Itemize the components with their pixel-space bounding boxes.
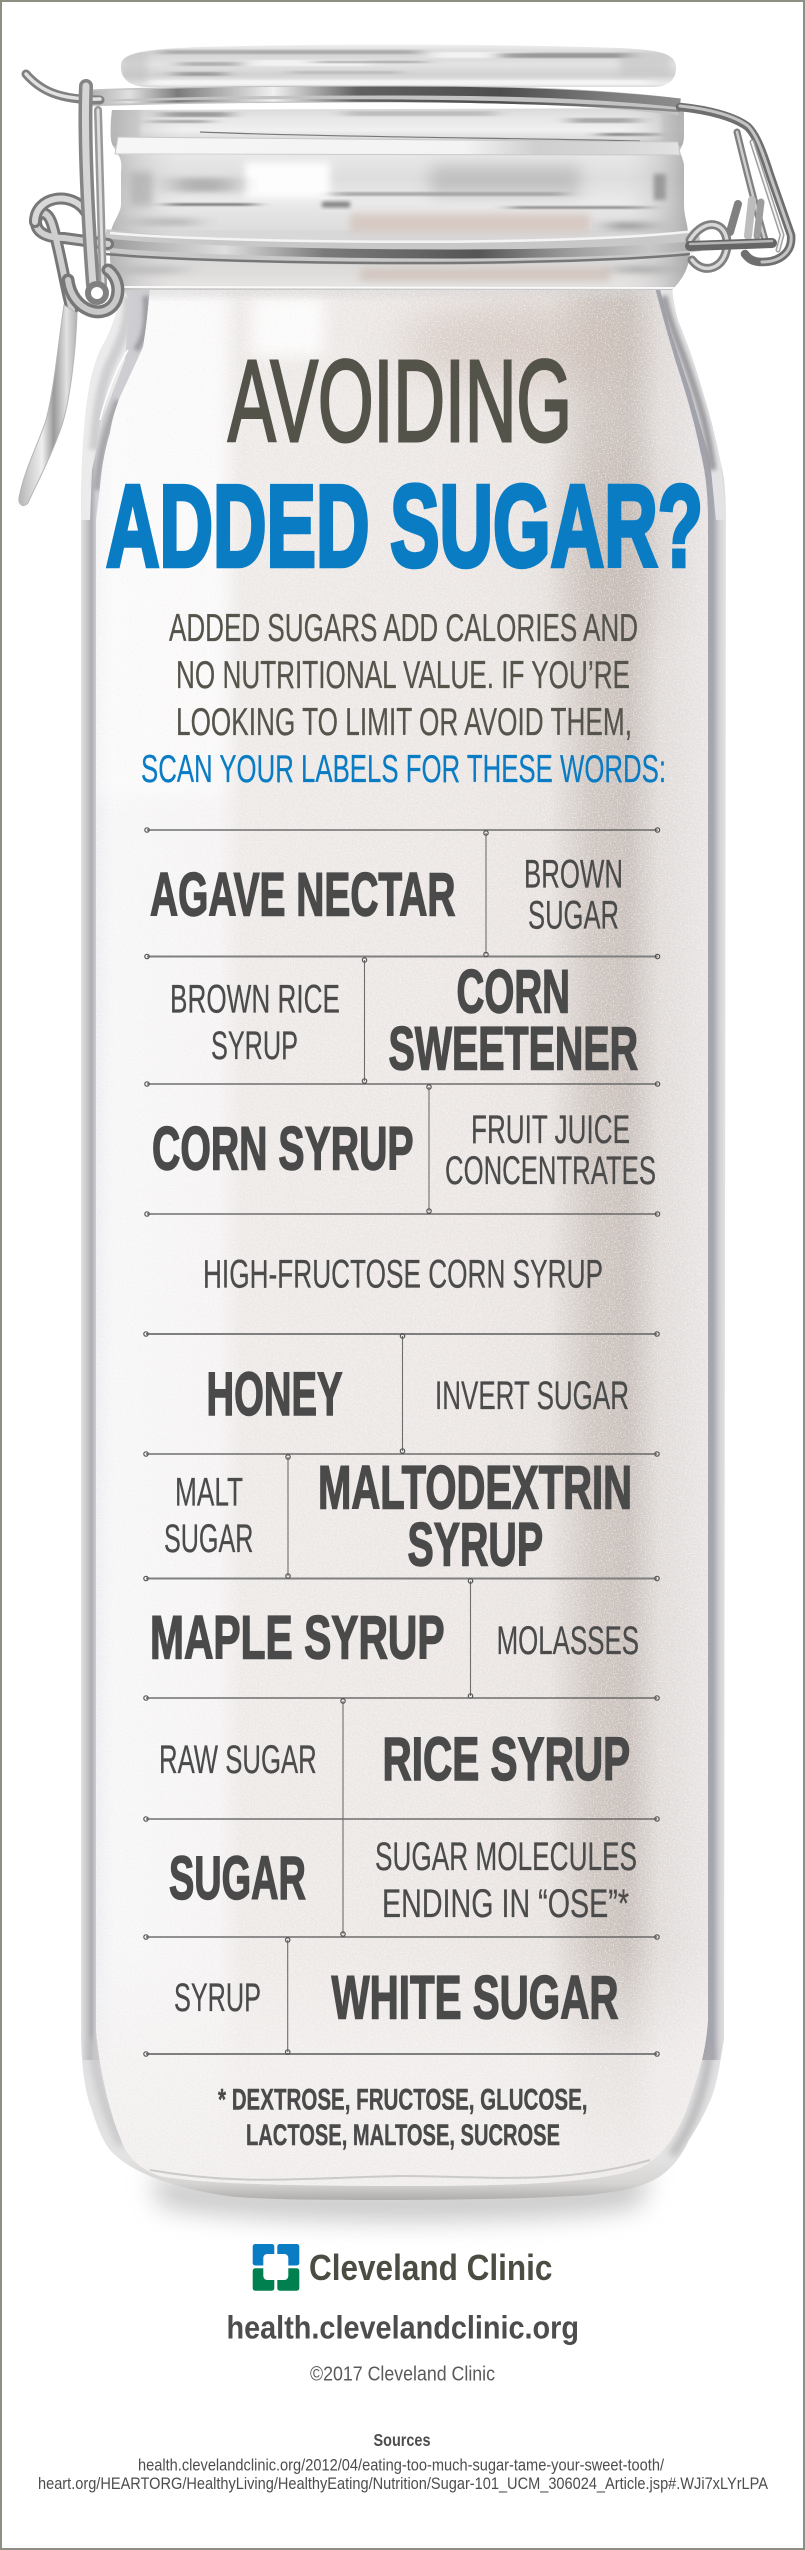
- fruit juice concentrates: [445, 1108, 656, 1193]
- maltodextrin syrup: SYRUP: [408, 1511, 543, 1579]
- sources heading: Sources: [374, 2430, 431, 2450]
- footnote: [218, 2084, 588, 2152]
- upper metal wire band: [82, 91, 680, 111]
- vertical bail wire: [85, 86, 103, 285]
- fruit juice concentrates: FRUIT JUICE: [471, 1108, 630, 1152]
- maltodextrin syrup: MALTODEXTRIN: [318, 1453, 632, 1521]
- rice syrup: RICE SYRUP: [382, 1725, 630, 1793]
- malt sugar: SUGAR: [164, 1517, 253, 1561]
- website: health.clevelandclinic.org: [226, 2310, 579, 2346]
- sources: [38, 2430, 769, 2493]
- sugar molecules ending in ose: [375, 1835, 637, 1926]
- lever loop and arm: [35, 199, 108, 310]
- pins: [730, 200, 761, 236]
- title line: avoiding: AVOIDING: [228, 336, 572, 466]
- brand name: Cleveland Clinic: [309, 2247, 552, 2288]
- outer bail: [680, 106, 791, 262]
- glass lid: [120, 44, 676, 87]
- white gasket ring: [115, 137, 680, 155]
- invert sugar: INVERT SUGAR: [435, 1374, 629, 1418]
- jar neck glass: [105, 103, 695, 293]
- long lever tail: [19, 305, 77, 505]
- copyright: ©2017 Cleveland Clinic: [310, 2364, 495, 2386]
- corn sweetener: [388, 957, 638, 1083]
- brown sugar: [524, 852, 623, 938]
- raw sugar: RAW SUGAR: [159, 1738, 317, 1782]
- white sugar: WHITE SUGAR: [332, 1963, 618, 2031]
- agave nectar: AGAVE NECTAR: [150, 860, 456, 928]
- brown rice syrup: SYRUP: [211, 1024, 298, 1068]
- honey: HONEY: [206, 1360, 342, 1428]
- title: [106, 336, 703, 591]
- list of added sugar names: [150, 852, 656, 2031]
- source link 1: health.clevelandclinic.org/2012/04/eating-too-much-sugar-tame-your-sweet-tooth/: [138, 2456, 664, 2475]
- icon: cleveland clinic logo: [253, 2244, 299, 2291]
- high-fructose corn syrup: HIGH-FRUCTOSE CORN SYRUP: [203, 1252, 603, 1296]
- bottom ring: [68, 270, 118, 312]
- right wire clasp: [680, 106, 791, 268]
- jar bottom rim: [150, 2160, 650, 2180]
- corn sweetener: CORN: [456, 957, 570, 1025]
- inner bail wires: [737, 132, 782, 250]
- hook wire: [26, 74, 100, 100]
- malt sugar: MALT: [175, 1471, 243, 1515]
- left wire clasp: [26, 74, 118, 312]
- sugar: SUGAR: [169, 1844, 306, 1912]
- footnote: * DEXTROSE, FRUCTOSE, GLUCOSE,: [218, 2084, 588, 2116]
- sugar molecules ending in ose: ENDING IN “OSE”*: [382, 1882, 629, 1926]
- coil and end rod: [690, 225, 772, 268]
- jar glass body: [70, 280, 740, 2210]
- table grid lines: [144, 828, 660, 2056]
- introduction text: [141, 607, 666, 791]
- brown rice syrup: BROWN RICE: [170, 978, 340, 1022]
- syrup: SYRUP: [174, 1976, 261, 2020]
- corn syrup: CORN SYRUP: [152, 1115, 414, 1183]
- jar floor shadow: [150, 2170, 650, 2220]
- sugar molecules ending in ose: SUGAR MOLECULES: [375, 1835, 637, 1879]
- molasses: MOLASSES: [497, 1619, 639, 1663]
- brown rice syrup: [170, 978, 340, 1068]
- brown sugar: SUGAR: [528, 894, 619, 938]
- maltodextrin syrup: [318, 1453, 632, 1579]
- maple syrup: MAPLE SYRUP: [150, 1603, 445, 1671]
- brown sugar: BROWN: [524, 852, 623, 896]
- fruit juice concentrates: CONCENTRATES: [445, 1149, 656, 1193]
- lower metal wire band: [105, 231, 700, 263]
- footnote: LACTOSE, MALTOSE, SUCROSE: [246, 2119, 560, 2152]
- malt sugar: [164, 1471, 253, 1561]
- corn sweetener: SWEETENER: [388, 1015, 638, 1083]
- sugar fill: [90, 280, 720, 2200]
